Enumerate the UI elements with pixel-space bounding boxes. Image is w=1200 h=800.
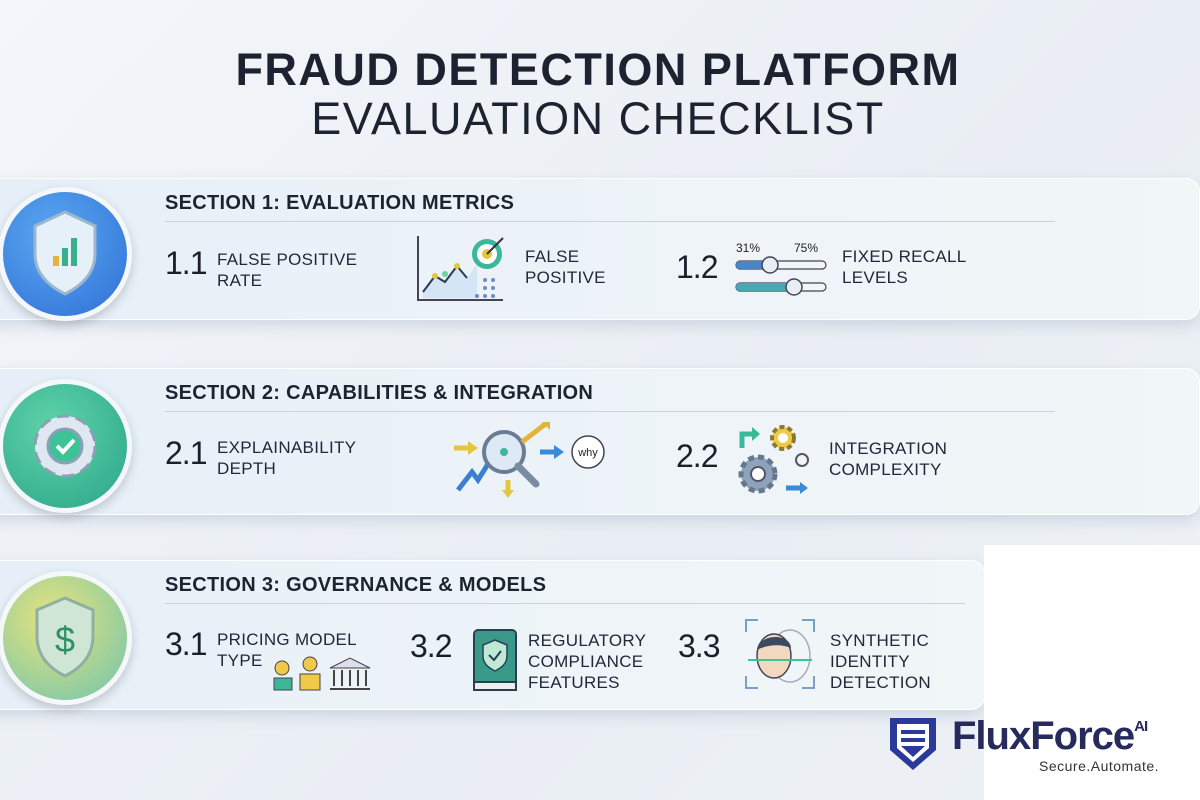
title: EVALUATION CHECKLIST (311, 93, 885, 144)
panel: section 3 (0, 560, 985, 710)
item 3.3: 3.3 (678, 628, 719, 664)
item 1.2: 1.2 (676, 249, 717, 285)
icon: gears (738, 425, 809, 494)
title: FRAUD DETECTION PLATFORM (235, 44, 961, 95)
item 2.1: 2.1 (165, 435, 206, 471)
heading: section 1: SECTION 1: EVALUATION METRICS (165, 192, 514, 214)
label: false positive: FALSE (525, 247, 579, 266)
item 2.1 (165, 435, 356, 478)
item 2.2: 2.2 (676, 438, 717, 474)
icon: chart with target (417, 236, 504, 301)
icon: sliders: 75% (794, 241, 818, 255)
item 3.1: TYPE (217, 651, 263, 670)
label: regulatory: FEATURES (528, 673, 620, 692)
label: synthetic identity (830, 631, 931, 692)
label: regulatory: COMPLIANCE (528, 652, 643, 671)
logo: FluxForce AI: FluxForceAI (952, 714, 1147, 758)
logo: FluxForce AI: Secure.Automate. (1039, 758, 1159, 774)
icon: face scan (745, 619, 815, 689)
panel: section 1 (0, 178, 1200, 320)
item 1.1 (165, 245, 357, 290)
item 1.1: FALSE POSITIVE (217, 250, 357, 269)
label: integration complexity: COMPLEXITY (829, 460, 942, 479)
item 1.1: 1.1 (165, 245, 206, 281)
icon: sliders: 31% (736, 241, 760, 255)
label: fixed recall (842, 247, 967, 287)
icon: coins bank (274, 656, 370, 690)
icon: sliders (735, 241, 827, 296)
label: false positive (525, 247, 606, 287)
label: synthetic identity: SYNTHETIC (830, 631, 929, 650)
item 2.1: EXPLAINABILITY (217, 438, 356, 457)
item 3.1: PRICING MODEL (217, 630, 357, 649)
label: fixed recall: FIXED RECALL (842, 247, 967, 266)
item 3.1: 3.1 (165, 626, 206, 662)
icon: shield chart circle (0, 187, 132, 321)
icon: dollar shield circle (0, 571, 132, 705)
white logo area (984, 545, 1200, 800)
label: false positive: POSITIVE (525, 268, 606, 287)
panel: section 2 (0, 368, 1200, 515)
heading: section 3: SECTION 3: GOVERNANCE & MODELS (165, 574, 546, 596)
logo: FluxForce AI (890, 714, 1159, 774)
icon: magnifier why: why (577, 447, 598, 459)
label: synthetic identity: IDENTITY (830, 652, 910, 671)
item 3.2: 3.2 (410, 628, 451, 664)
label: regulatory (528, 631, 646, 692)
label: regulatory: REGULATORY (528, 631, 646, 650)
item 1.1: RATE (217, 271, 262, 290)
heading: section 2: SECTION 2: CAPABILITIES & INTEGRATION (165, 382, 593, 404)
label: integration complexity: INTEGRATION (829, 439, 947, 458)
item 2.1: DEPTH (217, 459, 276, 478)
label: fixed recall: LEVELS (842, 268, 908, 287)
icon: magnifier why (454, 422, 605, 498)
icon: compliance book (473, 629, 517, 691)
label: synthetic identity: DETECTION (830, 673, 931, 692)
item 3.1 (165, 626, 357, 670)
icon: gear check circle (0, 379, 132, 513)
label: integration complexity (829, 439, 947, 479)
title (235, 44, 961, 144)
icon: dollar shield circle: $ (55, 619, 75, 660)
